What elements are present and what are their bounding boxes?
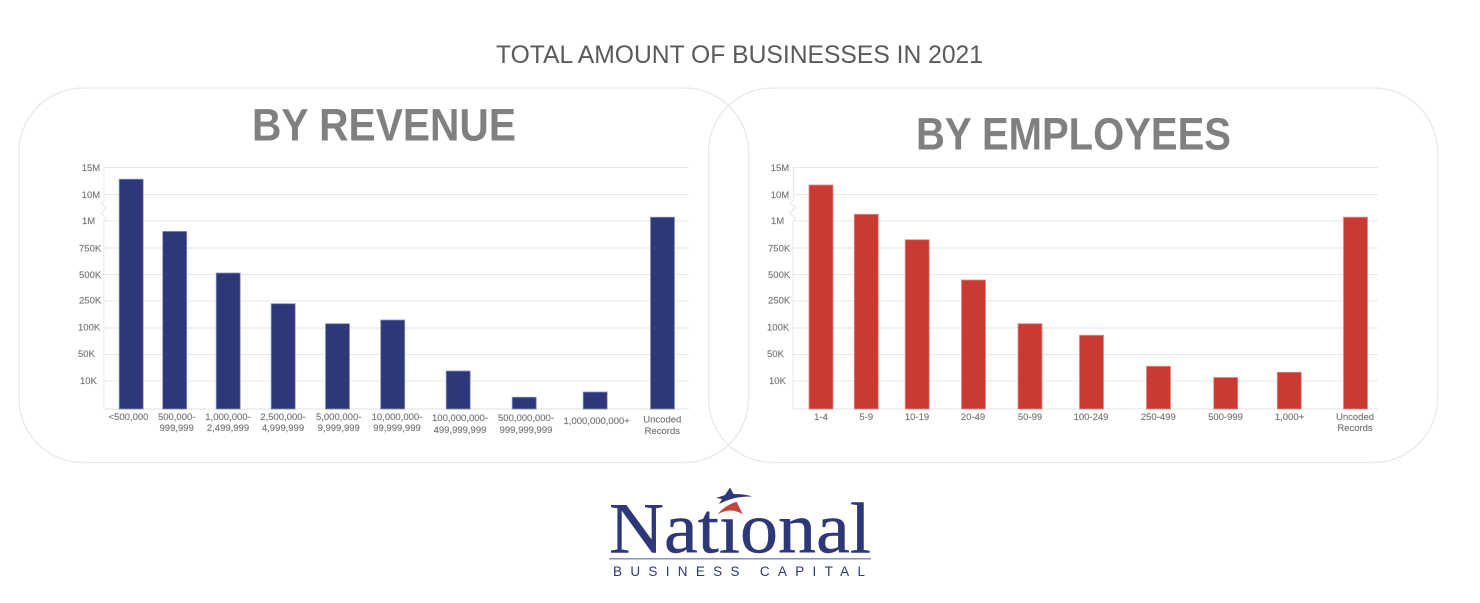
x axis labels: revenue: <500,000 [109, 412, 148, 423]
x axis labels: revenue: 499,999,999 [434, 425, 486, 436]
icon: red swoosh [718, 502, 743, 514]
y axis labels: revenue: 250K [79, 296, 102, 306]
x axis labels: revenue: 500,000- [158, 412, 195, 423]
x axis labels: revenue: 999,999,999 [500, 425, 552, 436]
logo wordmark: National [609, 488, 871, 568]
panel: by revenue [19, 88, 748, 462]
y axis labels: revenue: 100K [78, 322, 101, 334]
y axis labels: employees: 10M [771, 190, 789, 201]
y axis labels: revenue: 10M [82, 190, 100, 201]
x axis labels: employees: 250-499 [1141, 412, 1176, 423]
panel outline: by revenue [19, 88, 748, 462]
x axis labels: revenue: 2,499,999 [207, 423, 249, 434]
x axis labels: revenue [109, 412, 681, 437]
bar chart: employees [767, 163, 1378, 434]
x axis labels: employees: 100-249 [1074, 412, 1108, 423]
x axis labels: employees [814, 412, 1374, 434]
x axis labels: revenue: 100,000,000- [432, 413, 488, 424]
x axis labels: revenue: 1,000,000,000+ [564, 416, 630, 427]
y axis labels: employees: 100K [767, 322, 790, 334]
heading: by revenue: BY REVENUE [252, 100, 516, 150]
y axis labels: employees: 500K [768, 270, 791, 281]
x axis labels: employees: 500-999 [1208, 412, 1243, 423]
x axis labels: revenue: 99,999,999 [373, 423, 421, 434]
y axis labels: employees: 250K [768, 296, 791, 306]
logo: National Business Capital [609, 488, 871, 579]
y axis labels: revenue: 500K [79, 270, 102, 281]
x axis labels: revenue: 9,999,999 [318, 423, 360, 434]
bar chart: revenue [78, 163, 689, 437]
x axis labels: employees: 50-99 [1018, 412, 1042, 423]
x axis labels: employees: 20-49 [961, 412, 985, 423]
panel outline: by employees [708, 88, 1438, 462]
x axis labels: employees: 1-4 [814, 412, 828, 423]
y axis labels: employees: 10K [769, 376, 787, 387]
y axis labels: employees: 1M [771, 216, 784, 227]
x axis labels: employees: 1,000+ [1275, 412, 1305, 423]
title: TOTAL AMOUNT OF BUSINESSES IN 2021 [496, 41, 983, 69]
y axis labels: revenue: 50K [78, 349, 96, 360]
bars: employees [809, 185, 1368, 409]
x axis labels: employees: 5-9 [859, 412, 873, 423]
x axis labels: revenue: 1,000,000- [205, 412, 251, 423]
y axis labels: employees: 50K [767, 349, 785, 360]
x axis labels: revenue: 2,500,000- [260, 412, 306, 423]
logo rule [609, 558, 871, 560]
y axis labels: revenue: 750K [79, 244, 102, 254]
x axis labels: revenue: 999,999 [160, 423, 194, 434]
y axis labels: revenue: 1M [82, 216, 95, 227]
heading: by employees: BY EMPLOYEES [916, 108, 1231, 160]
y axis labels: revenue: 10K [80, 376, 98, 387]
y axis labels: revenue: 15M [82, 163, 100, 174]
icon: star [716, 488, 752, 504]
panel: by employees [708, 88, 1438, 462]
x axis labels: employees: 10-19 [905, 412, 929, 423]
x axis labels: revenue: Uncoded [643, 414, 681, 426]
logo tagline: BUSINESS CAPITAL [613, 564, 865, 579]
x axis labels: revenue: Records [645, 426, 680, 437]
y axis labels: employees [767, 163, 791, 387]
x axis labels: revenue: 500,000,000- [498, 413, 554, 424]
x axis labels: revenue: 10,000,000- [372, 412, 422, 423]
y axis labels: revenue [78, 163, 102, 387]
y axis labels: employees: 15M [771, 163, 789, 174]
y axis labels: employees: 750K [768, 244, 791, 254]
bars: revenue [119, 179, 674, 409]
x axis labels: revenue: 4,999,999 [262, 423, 304, 434]
x axis labels: employees: Uncoded [1336, 412, 1374, 423]
x axis labels: employees: Records [1337, 423, 1373, 434]
x axis labels: revenue: 5,000,000- [316, 412, 361, 423]
